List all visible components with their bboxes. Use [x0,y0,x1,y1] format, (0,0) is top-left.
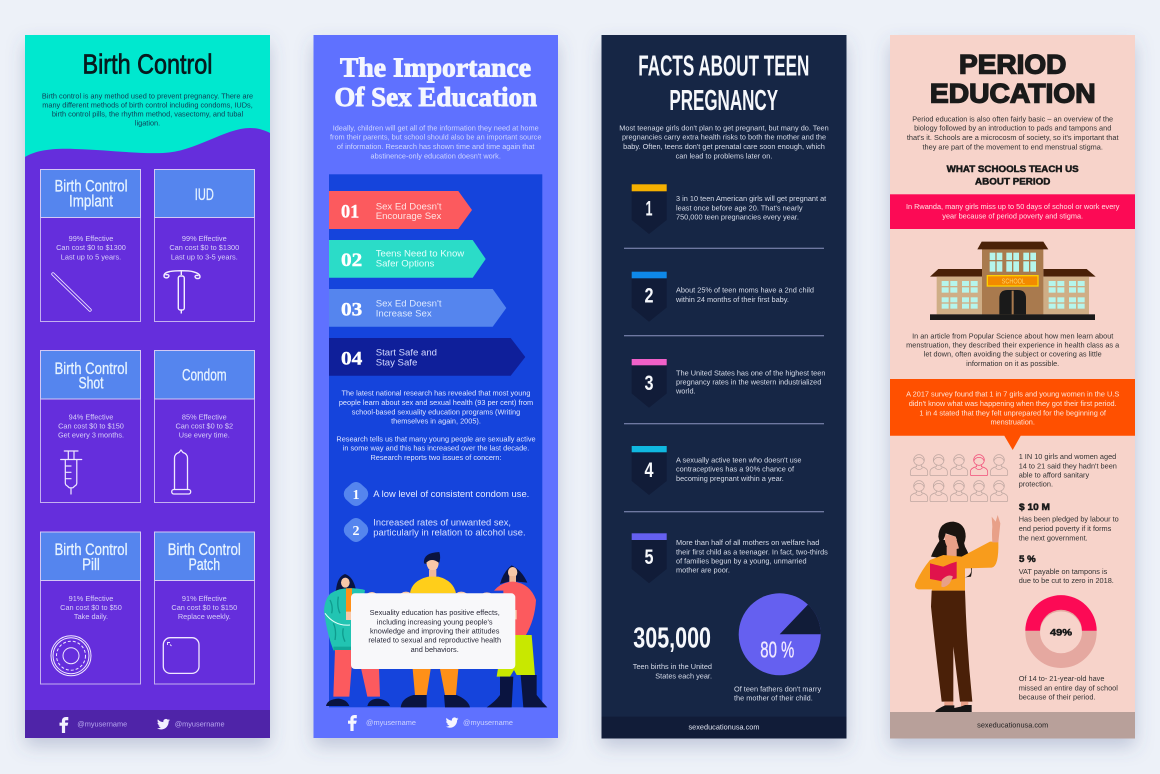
card: patch: Patch [188,555,220,574]
divider lines [624,248,824,512]
person center [401,552,470,707]
fact 5: of families begun by a young, unmarried [676,556,807,565]
fact 1 [632,184,826,234]
icon: condom [172,450,191,494]
subheading [947,164,1079,187]
illustration: school building: SCHOOL [1002,278,1025,285]
title [638,51,809,117]
card: condom: Use every time. [179,431,230,440]
fact 5: More than half of all mothers on welfare had [676,538,819,547]
donut caption: Of 14 to- 21-year-old have [1019,674,1104,683]
arrow 01: 01 [341,201,359,222]
article text: In an article from Popular Science about how men learn about [912,331,1113,340]
fact 2: within 24 months of their first baby. [675,295,789,304]
footer: sexeducationusa.com [688,722,760,731]
pie chart: 80 % [760,636,794,662]
title: PREGNANCY [669,85,778,117]
article text: let down, often avoiding the subject or covering as little [924,350,1102,359]
stat: $10M: Has been pledged by labour to [1019,515,1119,524]
research text: people learn about sex and sexual health (93 per cent) from [339,398,533,407]
card: patch: Replace weekly. [178,612,231,621]
callout: 2017 survey: A 2017 survey found that 1 in 7 girls and young women in the U.S [906,390,1119,399]
intro text: that's it. Schools are a microcosm of society, so it's important that [907,133,1119,142]
arrow 02 [329,240,486,278]
panel: importance of sex education [314,35,558,738]
callout: 2017 survey: menstruation. [990,418,1035,427]
concern 1: 1 [352,488,360,503]
concern 2: particularly in relation to alcohol use. [373,527,526,538]
intro text: ligation. [135,119,160,128]
footer socials: @myusername [366,718,416,727]
arrow 02: Safer Options [376,259,435,270]
card: shot: Get every 3 months. [58,431,124,440]
stat: 1 in 10 [1019,452,1117,489]
callout: Rwanda: In Rwanda, many girls miss up to 50 days of school or work every [906,202,1120,211]
footer socials: @myusername [463,718,513,727]
callout: 2017 survey [890,379,1135,450]
card: implant: 99% Effective [69,234,113,243]
intro text [619,123,829,160]
intro text: of information. Research has shown time and time again that [337,142,534,151]
intro text [330,123,541,160]
research text: Research tells us that many young people are sexually active [336,435,536,444]
person left [324,574,390,706]
fact 3 [632,359,825,408]
card: pill [40,532,140,684]
card: condom: Can cost $0 to $2 [176,421,233,430]
icon: pill pack [51,636,91,676]
stat: 5%: due to be cut to zero in 2018. [1019,576,1114,585]
illustration: three people holding a sign [324,552,547,707]
intro text: biology followed by an introduction to pads and tampons and [914,124,1111,133]
stat: teen births: Teen births in the United [633,662,712,671]
card: patch [154,532,254,684]
intro text: birth control pills, the rhythm method, vasectomy, and tubal [52,110,244,119]
sign card: and behaviors. [411,645,459,654]
card: condom: 85% Effective [182,412,227,421]
fact 1: 3 in 10 teen American girls will get pregnant at [676,194,826,203]
fact 4 [632,446,802,495]
card: condom: Condom [182,366,227,385]
donut caption: because of their period. [1019,692,1095,701]
title: PERIOD [959,49,1066,79]
article text: menstruation, they described their experience in health class as a [906,340,1120,349]
callout: 2017 survey: didn't know what was happening when they got their first period. [909,399,1117,408]
callout: 2017 survey: 1 in 4 stated that they felt unprepared for the beginning of [919,408,1107,417]
fact 4: A sexually active teen who doesn't use [676,455,802,464]
footer band: @myusername [175,720,225,729]
arrow 04: Stay Safe [376,358,417,369]
research text: themselves in again, 2005). [391,417,481,426]
stat: 1 in 10: 1 IN 10 girls and women aged [1019,452,1116,461]
card: shot: Can cost $0 to $150 [58,421,124,430]
card: IUD: Can cost $0 to $1300 [169,243,239,252]
intro text: from their parents, but school should also be an important source [330,133,541,142]
icon: twitter [157,719,170,729]
fact 3: The United States has one of the highest teen [676,368,825,377]
sign card: including increasing young people's [377,617,493,626]
fact 5: their first child as a teenager. In fact, two-thirds [676,547,828,556]
research text: in some way and this has increased over the last decade. [343,444,529,453]
stat: $10M: end period poverty if it forms [1019,524,1112,533]
arrow 01: Encourage Sex [376,211,442,222]
arrow 04: 04 [341,348,363,369]
footer socials [348,715,513,731]
concern 2: Increased rates of unwanted sex, [373,517,511,528]
inner blue panel [329,174,542,707]
fact 3: pregnancy rates in the western industrialized [676,378,821,387]
intro text: Most teenage girls don't plan to get pregnant, but many do. Teen [619,123,829,132]
fact 1: 750,000 teen pregnancies every year. [676,212,799,221]
card: shot: Birth Control [54,359,128,378]
card: patch: Birth Control [168,540,241,559]
panel: facts about teen pregnancy [602,35,846,738]
sign card: related to sexual and reproductive health [368,636,501,645]
card: patch: Can cost $0 to $150 [171,603,237,612]
stat: teen births: 305,000 [633,623,711,655]
arrow 01: Sex Ed Doesn't [376,201,442,212]
icon: patch [163,638,199,673]
intro text [42,91,253,128]
title: FACTS ABOUT TEEN [638,51,809,83]
arrow 03: 03 [341,299,362,320]
stat: $10M [1019,502,1119,542]
concern 1 [344,482,529,506]
donut chart: 49% [1050,627,1073,638]
footer [602,717,846,738]
arrow 02: 02 [341,250,362,271]
illustration: woman with book [915,515,1000,712]
card: implant: Implant [69,192,113,211]
fact 1: 1 [646,198,653,221]
fact 4: becoming pregnant within a year. [676,474,784,483]
article text [906,331,1120,368]
intro text: Ideally, children will get all of the information they need at home [333,123,539,132]
stat: teen births [633,623,712,680]
icon: syringe [61,451,82,494]
panel: period education [890,35,1135,738]
card: implant: Birth Control [54,177,128,196]
research text: Research reports two issues of concern: [370,453,502,462]
footer band: @myusername [77,720,127,729]
intro text: Period education is also often fairly basic – an overview of the [912,115,1113,124]
footer band [25,710,270,738]
arrow 04: Start Safe and [376,348,437,359]
card: pill: Pill [82,555,100,574]
pictogram: 1 in 10 girls [910,455,1008,502]
research text [336,389,536,462]
icon: facebook [348,715,357,731]
fact 4: 4 [644,459,654,482]
article text: information on it as possible. [966,359,1059,368]
stat: $10M: $ 10 M [1019,502,1050,513]
card: shot: Shot [78,373,104,392]
illustration: school building [930,242,1096,320]
icon: twitter [446,717,458,728]
card: implant: Can cost $0 to $1300 [56,243,126,252]
intro text: abstinence-only education doesn't work. [370,151,501,160]
pie caption: Of teen fathers don't marry [734,684,821,693]
stat: 5% [1019,554,1114,585]
concern 2 [344,517,526,542]
intro text: they are part of the movement to end menstrual stigma. [922,142,1103,151]
arrow 03 [329,289,506,327]
card: implant: Last up to 5 years. [61,252,121,261]
title: EDUCATION [930,79,1096,109]
teal header wave [25,35,270,157]
fact 4: contraceptives has a 90% chance of [676,465,795,474]
concern 1: A low level of consistent condom use. [373,489,529,500]
intro text [907,115,1119,151]
subheading: WHAT SCHOOLS TEACH US [947,164,1079,175]
donut chart [1025,595,1097,661]
card: condom [154,350,254,502]
stat: $10M: the next government. [1019,533,1088,542]
pie chart [739,593,821,675]
card: pill: Can cost $0 to $50 [60,603,122,612]
intro text: Birth control is any method used to prevent pregnancy. There are [42,91,253,100]
fact 2: About 25% of teen moms have a 2nd child [676,286,814,295]
callout: Rwanda [890,194,1135,229]
person right [482,565,547,707]
concern 2: 2 [352,524,360,539]
donut caption [1019,674,1118,701]
footer [890,712,1135,738]
fact 5 [632,533,828,583]
card: IUD: IUD [195,185,214,204]
research text: school-based sexuality education programs (Writing [352,407,520,416]
intro text: can lead to problems later on. [676,151,772,160]
card: pill: Take daily. [74,612,108,621]
fact 1: least once before age 20. That's nearly [676,203,803,212]
donut caption: missed an entire day of school [1019,683,1118,692]
arrow 01 [329,191,472,229]
sign card: knowledge and improving their attitudes [370,627,500,636]
card: IUD: 99% Effective [182,234,227,243]
card: IUD [154,170,254,322]
intro text: many different methods of birth control including condoms, IUDs, [42,100,253,109]
intro text: pregnancies carry extra health risks to both the mother and the [622,133,826,142]
fact 5: 5 [644,546,654,569]
icon: facebook [60,717,68,733]
title: Birth Control [82,48,212,80]
card: shot [40,350,140,502]
sign card: Sexuality education has positive effects, [370,608,500,617]
research text: The latest national research has revealed that most young [341,389,531,398]
stat: 5%: VAT payable on tampons is [1019,567,1108,576]
icon: IUD [164,271,200,314]
title [334,53,537,112]
fact 3: 3 [644,372,654,395]
stat: 5%: 5 % [1019,554,1036,565]
stat: 1 in 10: able to afford sanitary [1019,471,1090,480]
intro text: baby. Often, teens don't get prenatal care soon enough, which [623,142,825,151]
fact 2: 2 [644,285,654,308]
card: implant [40,170,140,322]
arrow 04 [329,338,525,376]
card: shot: 94% Effective [69,412,113,421]
icon: implant rod [53,274,90,310]
footer: sexeducationusa.com [977,720,1048,729]
callout: Rwanda: year because of period poverty and stigma. [942,211,1083,220]
card: pill: 91% Effective [69,594,113,603]
card: IUD: Last up to 3-5 years. [171,252,238,261]
pie caption [734,684,821,703]
arrow 03: Sex Ed Doesn't [376,299,442,310]
sign card [351,593,515,669]
arrow 02: Teens Need to Know [376,249,464,260]
title: The Importance [340,53,531,83]
fact 5: mother are poor. [676,566,730,575]
fact 2 [632,272,814,322]
subheading: ABOUT PERIOD [975,176,1050,187]
card: patch: 91% Effective [182,594,227,603]
title [930,49,1096,109]
fact 3: world. [675,386,696,395]
title: Of Sex Education [334,82,537,112]
stat: 1 in 10: 14 to 21 said they hadn't been [1019,461,1117,470]
stat: teen births: States each year. [655,671,712,680]
panel: birth control [25,35,270,738]
pie caption: the mother of their child. [734,694,813,703]
stat: 1 in 10: protection. [1019,480,1053,489]
arrow 03: Increase Sex [376,309,432,320]
card: pill: Birth Control [54,540,128,559]
